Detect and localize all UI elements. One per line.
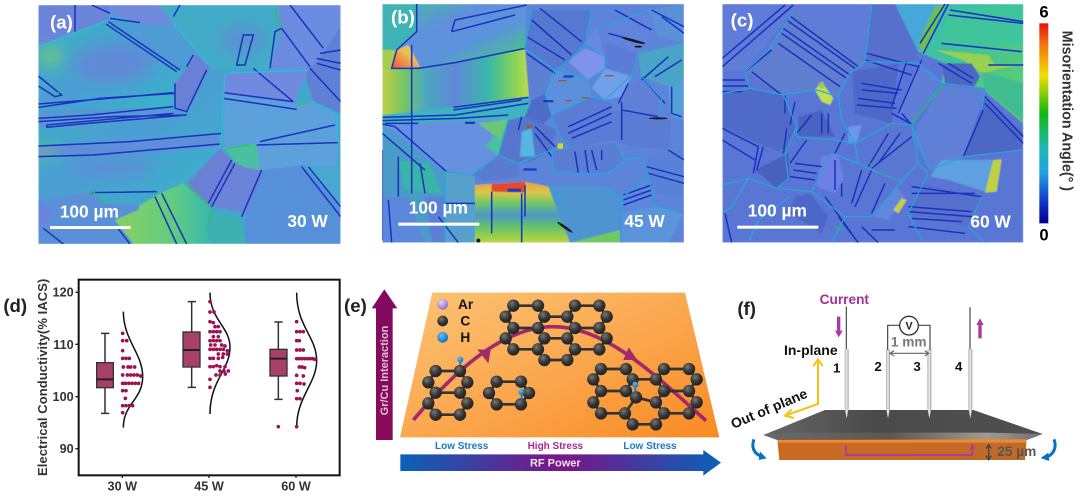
power label a: 30 W bbox=[287, 211, 328, 231]
label c: (c) bbox=[731, 10, 753, 31]
y ticks: 110 bbox=[53, 338, 74, 352]
stress labels: Low Stress bbox=[435, 441, 489, 452]
axis arrow: Gr/Cu interaction: Gr/Cu Interaction bbox=[379, 325, 391, 415]
plate: graphene bbox=[763, 410, 1043, 440]
panel c: misorientation map 60 W bbox=[722, 3, 1074, 245]
probe numbers: 4 bbox=[955, 359, 963, 374]
stress labels: High Stress bbox=[528, 441, 584, 452]
label f: (f) bbox=[737, 298, 756, 319]
colorbar min: 0 bbox=[1039, 226, 1049, 245]
colorbar ramp bbox=[1039, 23, 1048, 223]
probes bbox=[845, 307, 972, 418]
lattice: left bbox=[422, 357, 473, 421]
plot frame bbox=[79, 280, 340, 475]
panel a: misorientation map 30 W bbox=[37, 5, 341, 244]
grain map c bbox=[722, 4, 1023, 243]
y ticks: 90 bbox=[60, 442, 74, 456]
power label b: 45 W bbox=[624, 211, 665, 231]
series 45 W bbox=[183, 293, 230, 414]
scale bar b bbox=[398, 223, 479, 226]
twin boundaries a bbox=[38, 5, 341, 244]
y ticks: 100 bbox=[53, 390, 74, 404]
thickness marker: 25 µm bbox=[997, 444, 1036, 459]
panel b: misorientation map 45 W bbox=[382, 4, 684, 243]
lattice: small bbox=[483, 375, 535, 410]
x labels: 60 W bbox=[281, 480, 311, 494]
probe numbers bbox=[833, 359, 963, 375]
probe numbers: 2 bbox=[874, 359, 882, 374]
stress labels bbox=[435, 441, 677, 452]
series 30 W bbox=[97, 312, 143, 428]
plate: copper bbox=[777, 439, 1027, 460]
stage trapezoid bbox=[400, 293, 719, 437]
scale bar c bbox=[737, 226, 818, 229]
stress labels: Low Stress bbox=[623, 441, 677, 452]
series 60 W bbox=[270, 293, 317, 428]
y ticks bbox=[53, 286, 79, 456]
rotation arrows bbox=[753, 439, 1055, 461]
panel e: graphene stress schematic bbox=[344, 289, 721, 476]
current arrows bbox=[835, 317, 984, 338]
panel f: four probe schematic bbox=[728, 292, 1055, 461]
label d: (d) bbox=[3, 295, 27, 316]
colorbar max: 6 bbox=[1039, 3, 1049, 22]
scale text b: 100 µm bbox=[409, 198, 468, 218]
scale bar a bbox=[50, 226, 131, 229]
twin boundaries c bbox=[722, 4, 1023, 243]
colorbar bbox=[1039, 3, 1074, 245]
power label c: 60 W bbox=[970, 212, 1011, 232]
RF power arrow: RF Power bbox=[530, 458, 581, 470]
voltmeter: V bbox=[905, 321, 913, 333]
label a: (a) bbox=[50, 11, 73, 32]
orientation axes: In-plane bbox=[784, 342, 838, 358]
y axis title: Electrical Conductivity(% IACS) bbox=[35, 279, 50, 476]
grain map b bbox=[382, 4, 684, 243]
scale text c: 100 µm bbox=[748, 201, 807, 221]
y ticks: 120 bbox=[53, 286, 74, 300]
legend bbox=[437, 297, 474, 345]
legend: C bbox=[460, 314, 470, 329]
axis arrow: Gr/Cu interaction bbox=[372, 289, 397, 440]
twin boundaries b bbox=[382, 4, 684, 243]
RF power arrow bbox=[400, 450, 721, 476]
label b: (b) bbox=[391, 6, 415, 27]
orientation axes bbox=[728, 342, 838, 432]
x labels: 45 W bbox=[194, 480, 224, 494]
scale text a: 100 µm bbox=[60, 201, 119, 221]
current label: Current bbox=[820, 292, 869, 307]
x labels: 30 W bbox=[108, 480, 137, 494]
lattice: right bbox=[587, 363, 703, 430]
colorbar title: Misorientation Angle(° ) bbox=[1058, 31, 1074, 191]
legend: H bbox=[460, 330, 470, 345]
panel d: conductivity raincloud chart bbox=[3, 279, 340, 494]
label e: (e) bbox=[344, 295, 367, 316]
orientation axes: Out of plane bbox=[728, 385, 810, 432]
probe numbers: 3 bbox=[913, 359, 921, 374]
stress curve bbox=[413, 327, 706, 421]
x labels bbox=[108, 475, 311, 494]
lattice: centre bbox=[499, 299, 613, 366]
current path bbox=[846, 443, 975, 455]
voltmeter bbox=[888, 316, 930, 356]
grain map a bbox=[37, 5, 341, 244]
legend: Ar bbox=[458, 297, 474, 312]
probe numbers: 1 bbox=[833, 360, 841, 375]
voltmeter: 1 mm bbox=[891, 334, 927, 349]
